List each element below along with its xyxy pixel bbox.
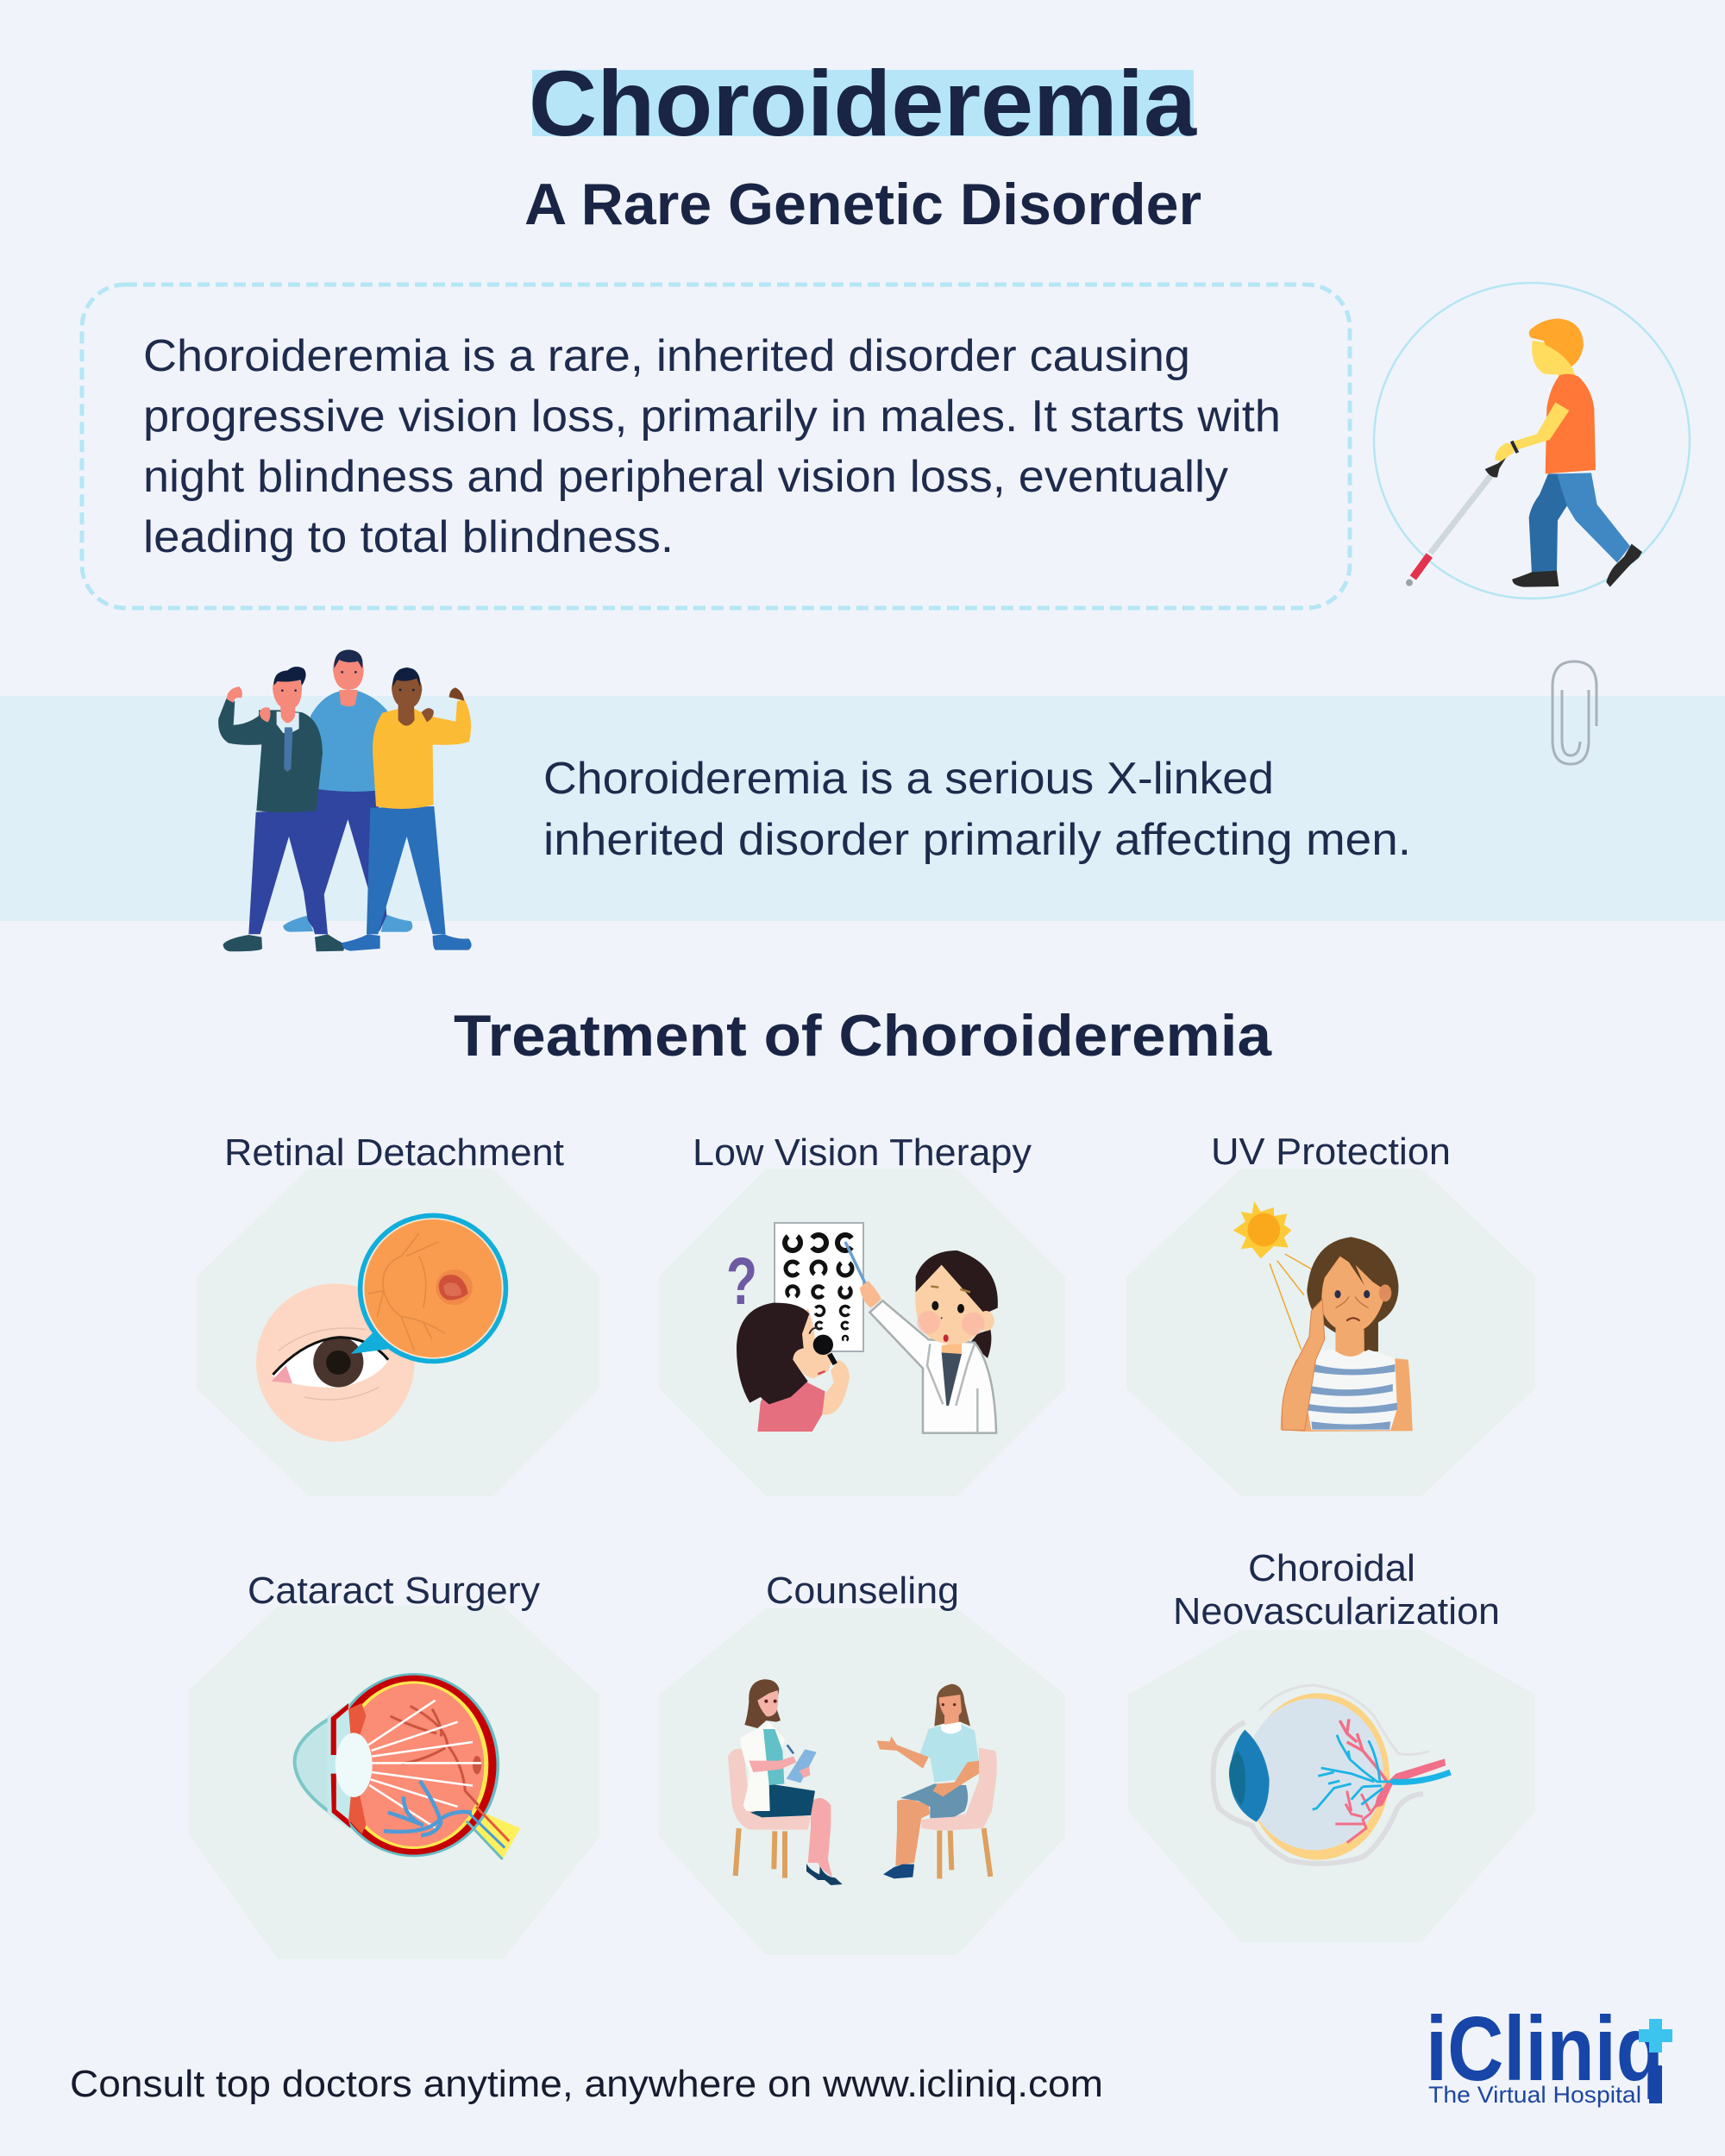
panel: low vision therapy bbox=[659, 1131, 1065, 1496]
illustration: woman in the sun bbox=[1233, 1201, 1413, 1432]
panel: retinal detachment: Retinal Detachment bbox=[224, 1131, 564, 1174]
panel: low vision therapy: Low Vision Therapy bbox=[693, 1131, 1032, 1174]
illustration: eye with retina bubble bbox=[256, 1213, 508, 1442]
icon: person walking with cane bbox=[1374, 283, 1690, 599]
panel: UV protection bbox=[1126, 1131, 1535, 1496]
panel: counseling: Counseling bbox=[766, 1570, 959, 1612]
text block: definition: Choroideremia is a rare, inherited disorder causing bbox=[143, 331, 1190, 381]
panel: definition callout bbox=[82, 285, 1350, 608]
illustration: eye with vessels bbox=[1214, 1685, 1451, 1864]
illustration: eye cross-section bbox=[295, 1673, 520, 1859]
panel: cataract surgery: Cataract Surgery bbox=[248, 1570, 540, 1612]
panel: counseling bbox=[659, 1570, 1065, 1955]
text block: definition: leading to total blindness. bbox=[143, 512, 674, 562]
icon: paperclip bbox=[1552, 661, 1596, 764]
panel: choroidal neovascularization: Choroidal bbox=[1248, 1547, 1415, 1589]
text block: definition: night blindness and peripheral vision loss, eventually bbox=[143, 452, 1228, 502]
text block: definition: progressive vision loss, primarily in males. It starts with bbox=[143, 392, 1281, 442]
subtitle: A Rare Genetic Disorder bbox=[524, 172, 1201, 237]
text block: X-linked statement: Choroideremia is a serious X-linked bbox=[543, 754, 1274, 804]
footer text: Consult top doctors anytime, anywhere on www.icliniq.com bbox=[70, 2063, 1103, 2105]
illustration: patient seated bbox=[877, 1684, 997, 1878]
band: X-linked note bbox=[0, 696, 1725, 921]
panel: UV protection: UV Protection bbox=[1211, 1131, 1451, 1173]
icon: logo plus bbox=[1639, 2019, 1672, 2053]
text block: X-linked statement bbox=[543, 754, 1411, 865]
heading: treatment: Treatment of Choroideremia bbox=[454, 1003, 1272, 1069]
text block: definition bbox=[143, 331, 1281, 562]
panel: retinal detachment bbox=[197, 1131, 599, 1496]
title highlight and title: Choroideremia bbox=[529, 51, 1197, 155]
panel: cataract surgery bbox=[189, 1570, 599, 1959]
illustration: three men bbox=[218, 649, 472, 951]
panel: choroidal neovascularization bbox=[1128, 1547, 1535, 1942]
panel: choroidal neovascularization: Neovascularization bbox=[1173, 1590, 1500, 1633]
illustration: girl covering one eye bbox=[737, 1303, 850, 1432]
illustration: eye chart bbox=[775, 1223, 863, 1351]
icon: question mark: ? bbox=[726, 1244, 757, 1319]
illustration: doctor seated bbox=[728, 1679, 843, 1885]
text block: X-linked statement: inherited disorder primarily affecting men. bbox=[543, 815, 1411, 865]
illustration: doctor pointing at chart bbox=[845, 1242, 998, 1433]
logo: iCliniq: The Virtual Hospital bbox=[1428, 2082, 1641, 2108]
logo: iCliniq: iCliniq bbox=[1426, 1998, 1664, 2100]
